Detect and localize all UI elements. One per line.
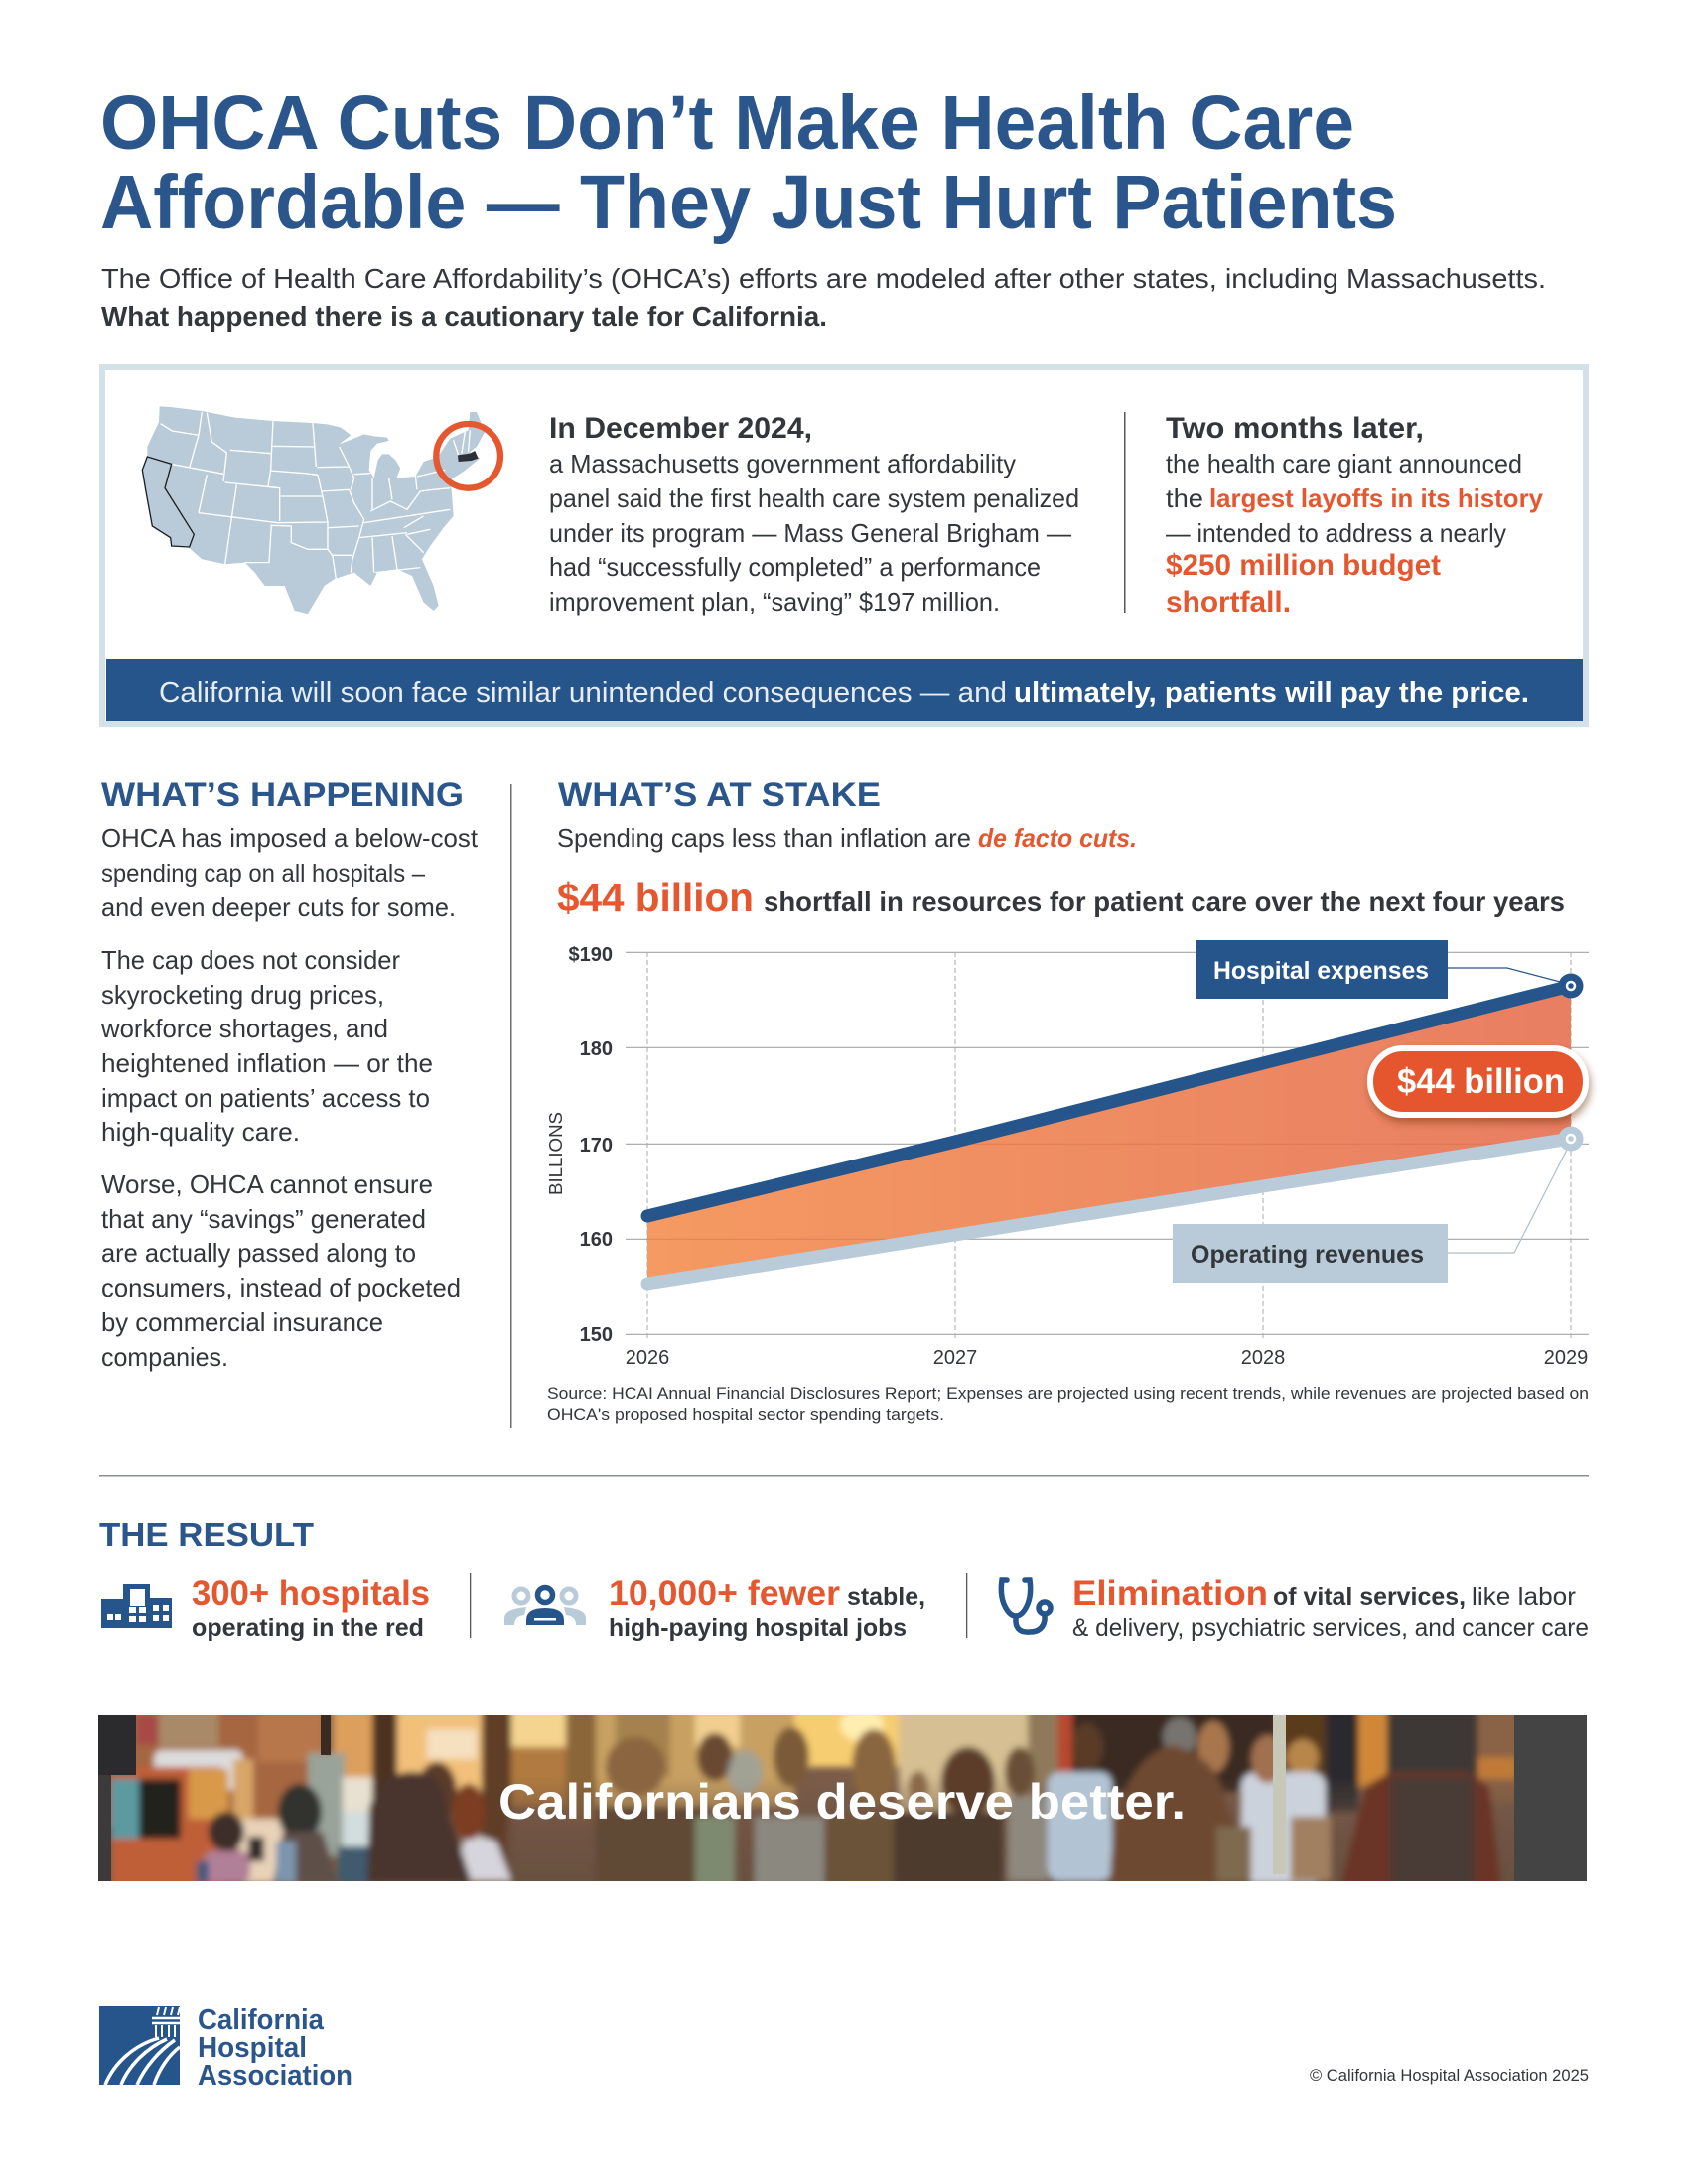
marker: revenues [1559, 1126, 1583, 1152]
x axis labels: 2028 [1241, 1347, 1285, 1369]
text block: December 2024 [549, 412, 1079, 616]
text block: companies. [101, 1342, 228, 1372]
text block: spending cap on all hospitals – [101, 860, 425, 887]
text block: two months later: largest layoffs in its history [1209, 483, 1544, 513]
x axis labels: 2027 [933, 1347, 977, 1369]
y axis labels: $190 [568, 944, 613, 966]
stat: hospitals: operating in the red [192, 1614, 424, 1642]
logo mark [99, 2006, 180, 2085]
text block: high-quality care. [101, 1117, 300, 1147]
text block: December 2024: In December 2024, [549, 412, 812, 445]
shortfall area [647, 986, 1571, 1284]
line chart [545, 940, 1589, 1369]
text block: and even deeper cuts for some. [101, 892, 456, 922]
stat: jobs: 10,000+ fewer [609, 1574, 840, 1613]
marker: expenses [1559, 973, 1583, 999]
banner: California consequences [106, 659, 1583, 721]
text block: heightened inflation — or the [101, 1048, 433, 1078]
x axis labels [626, 1347, 1588, 1369]
text block: two months later: Two months later, [1166, 412, 1424, 445]
banner: California consequences: California will soon face similar unintended consequences — and [159, 677, 1007, 709]
line: operating revenues [647, 1139, 1571, 1284]
label: operating revenues [1173, 1224, 1448, 1283]
banner: California consequences: ultimately, patients will pay the price. [1014, 677, 1529, 709]
background, right [1273, 1715, 1329, 1779]
subtitle: The Office of Health Care Affordability’s (OHCA’s) efforts are modeled after other states, including Massachusetts. [101, 263, 1546, 294]
subtitle: What happened there is a cautionary tale for California. [101, 301, 827, 332]
text block: two months later: the [1166, 483, 1203, 513]
heading: THE RESULT [99, 1516, 314, 1553]
text block [100, 823, 479, 1372]
intro text: Spending caps less than inflation are [557, 823, 971, 853]
title [100, 80, 1397, 245]
y axis title: BILLIONS [545, 1112, 566, 1195]
street [238, 1819, 293, 1883]
stat: services [1001, 1574, 1589, 1642]
text block: two months later: — intended to address a nearly [1166, 518, 1506, 548]
banner: street photo with closing message [98, 1715, 1587, 1881]
panel: Massachusetts story [102, 367, 1586, 724]
logo: California Hospital Association [99, 2004, 352, 2092]
title: Affordable — They Just Hurt Patients [100, 160, 1397, 245]
text block: December 2024: had “successfully completed” a performance [549, 552, 1041, 582]
logo: California Hospital Association: California [198, 2004, 325, 2036]
text block: two months later: $250 million budget [1166, 549, 1441, 582]
text block: two months later [1166, 412, 1544, 618]
copyright: © California Hospital Association 2025 [1310, 2066, 1589, 2085]
source note: OHCA's proposed hospital sector spending targets. [547, 1405, 944, 1424]
text block: consumers, instead of pocketed [101, 1273, 461, 1302]
text block: skyrocketing drug prices, [101, 980, 384, 1010]
source note: Source: HCAI Annual Financial Disclosures Report; Expenses are projected using recent trends, while revenues are projected based on [547, 1384, 1589, 1403]
subtitle [101, 263, 1546, 332]
text block: December 2024: under its program — Mass General Brigham — [549, 518, 1071, 548]
panel: what's at stake [545, 776, 1589, 1424]
logo: California Hospital Association: Hospital [198, 2032, 307, 2064]
section: the result [99, 1516, 1589, 1642]
x axis labels: 2026 [626, 1347, 669, 1369]
stat: jobs: stable, [847, 1583, 925, 1611]
text block: The cap does not consider [101, 945, 400, 975]
icon: US map [142, 406, 500, 614]
y axis labels [568, 944, 613, 1346]
intro text: de facto cuts. [978, 823, 1137, 853]
text block: impact on patients’ access to [101, 1083, 430, 1113]
stat: services: & delivery, psychiatric services, and cancer care [1072, 1614, 1589, 1642]
y axis labels: 150 [580, 1324, 613, 1346]
x axis labels: 2029 [1544, 1347, 1588, 1369]
stat: services: like labor [1472, 1583, 1576, 1611]
y axis labels: 170 [580, 1135, 613, 1157]
icon: people [504, 1588, 586, 1625]
title: OHCA Cuts Don’t Make Health Care [100, 80, 1354, 166]
text block: two months later: the health care giant announced [1166, 449, 1522, 478]
California outline [142, 457, 194, 547]
Massachusetts [458, 451, 479, 462]
text block: December 2024: a Massachusetts government affordability [549, 449, 1016, 478]
icon: stethoscope [1001, 1580, 1051, 1632]
stat: services: Elimination [1072, 1574, 1268, 1613]
text block: are actually passed along to [101, 1238, 416, 1268]
panel: what's happening [100, 776, 479, 1372]
text block: December 2024: improvement plan, “saving” $197 million. [549, 587, 1000, 616]
closing message: Californians deserve better. [498, 1774, 1186, 1830]
stat: jobs [504, 1574, 925, 1642]
leader lines [1448, 968, 1567, 1253]
stat: services: of vital services, [1273, 1583, 1466, 1611]
logo: California Hospital Association: Association [198, 2060, 352, 2092]
stat: jobs: high-paying hospital jobs [609, 1614, 907, 1642]
pedestrians, centre [697, 1733, 733, 1781]
text block: Worse, OHCA cannot ensure [101, 1169, 433, 1199]
lower shade [504, 1782, 1514, 1881]
text block: by commercial insurance [101, 1307, 383, 1337]
text block: OHCA has imposed a below-cost [101, 823, 479, 853]
stat: hospitals [101, 1574, 430, 1642]
text block: workforce shortages, and [100, 1014, 388, 1043]
heading: WHAT’S HAPPENING [101, 776, 464, 814]
icon: hospital buildings [101, 1584, 172, 1628]
background storefronts, left [111, 1715, 321, 1829]
highlight ring [436, 424, 500, 488]
stat: hospitals: 300+ hospitals [192, 1574, 430, 1613]
shortfall headline [557, 875, 1565, 920]
text block: December 2024: panel said the first health care system penalized [549, 483, 1079, 513]
label: operating revenues: Operating revenues [1191, 1241, 1424, 1269]
y axis labels: 160 [580, 1229, 613, 1251]
shortfall headline: shortfall in resources for patient care over the next four years [764, 887, 1565, 917]
line: hospital expenses [647, 986, 1571, 1216]
source note [547, 1384, 1589, 1424]
text block: two months later: shortfall. [1166, 586, 1291, 618]
callout: $44 billion: $44 billion [1397, 1062, 1565, 1101]
y axis labels: 180 [580, 1038, 613, 1060]
vehicle [154, 1750, 243, 1790]
heading: WHAT’S AT STAKE [558, 776, 881, 814]
label: hospital expenses [1196, 940, 1448, 999]
label: hospital expenses: Hospital expenses [1213, 957, 1429, 985]
shortfall headline: $44 billion [557, 875, 754, 920]
pedestrians, right [1048, 1772, 1112, 1881]
text block: that any “savings” generated [101, 1204, 426, 1234]
callout: $44 billion [1370, 1048, 1586, 1115]
pedestrians, left [209, 1812, 244, 1851]
background, centre [596, 1703, 794, 1807]
